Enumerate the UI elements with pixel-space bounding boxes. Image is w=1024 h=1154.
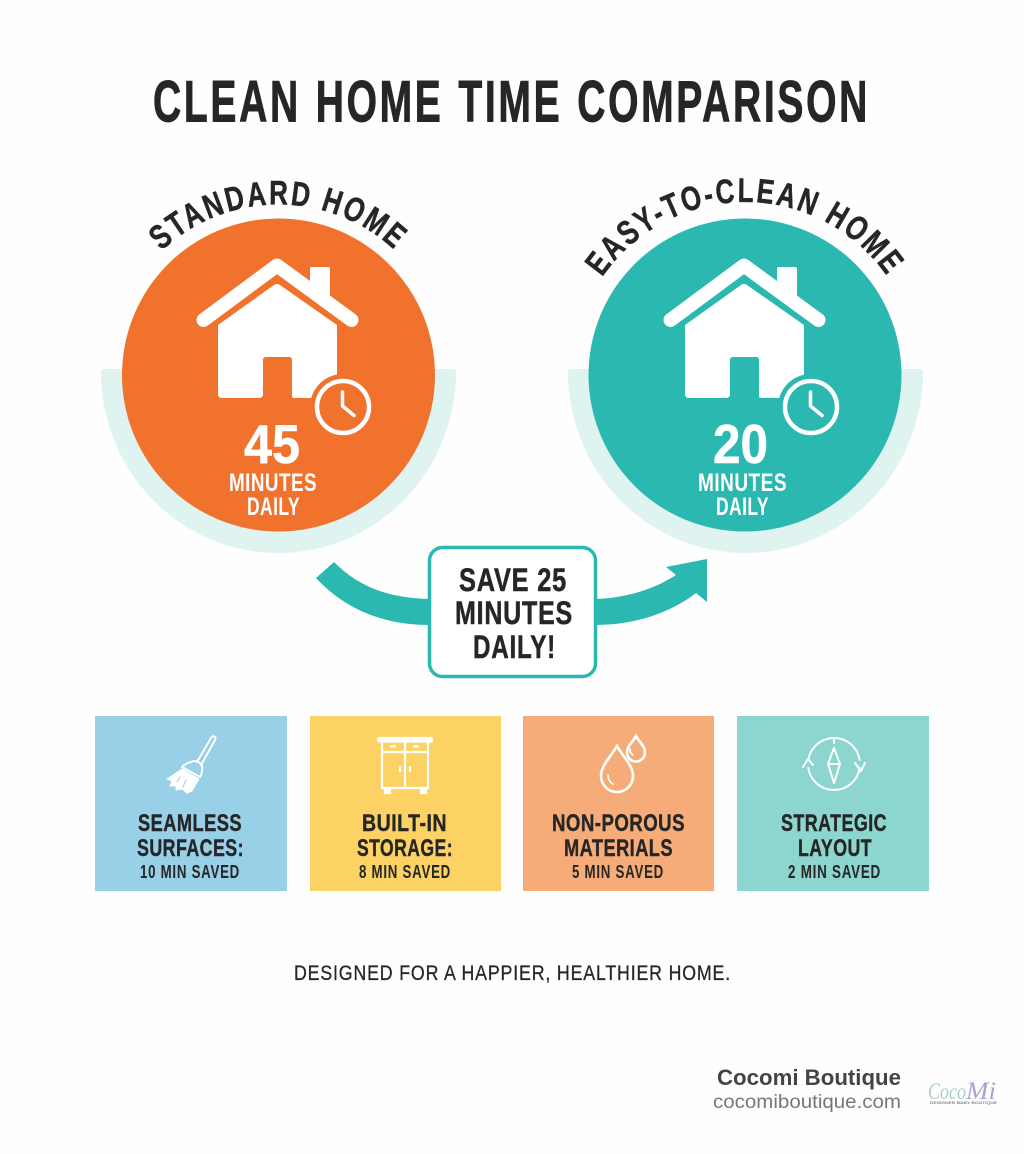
brand name (713, 1065, 901, 1113)
callout: save 25 minutes (430, 548, 596, 676)
text: 5 MIN SAVED (572, 862, 664, 882)
callout: save 25 minutes: SAVE 25 (459, 562, 567, 598)
label: standard home: STANDARD HOME (149, 180, 408, 249)
text: 8 MIN SAVED (359, 862, 451, 882)
value: 20 minutes daily: DAILY (716, 493, 769, 521)
value: 45 minutes daily: 45 (244, 413, 300, 475)
text: 2 MIN SAVED (788, 862, 881, 882)
circle (588, 218, 902, 532)
value: 20 minutes daily: 20 (713, 413, 768, 475)
icon: clock (310, 374, 376, 440)
text: 10 MIN SAVED (140, 862, 240, 882)
arrow: savings flow (316, 559, 707, 625)
icon: broom (167, 736, 216, 793)
value: 20 minutes daily (698, 413, 787, 521)
panel: built-in storage (310, 716, 501, 891)
panel: easy-to-clean home (568, 178, 923, 553)
text: NON-POROUS (552, 810, 685, 837)
brand logo: Mi (965, 1078, 996, 1105)
halo (101, 369, 456, 553)
icon: cabinet (378, 738, 432, 793)
text (552, 810, 685, 882)
text: STRATEGIC (781, 810, 887, 837)
brand logo: Coco (928, 1079, 966, 1104)
panel: standard home (101, 180, 456, 553)
text (357, 810, 453, 882)
brand logo: DESIGNER BABY BOUTIQUE (930, 1100, 997, 1105)
icon: water drops (601, 736, 645, 792)
icon: house (670, 266, 818, 398)
value: 45 minutes daily: DAILY (247, 493, 300, 521)
text (137, 810, 244, 882)
text: BUILT-IN (362, 810, 447, 837)
text (781, 810, 887, 882)
callout: save 25 minutes: MINUTES (455, 595, 573, 631)
halo (568, 369, 923, 553)
text: LAYOUT (798, 835, 872, 862)
value: 20 minutes daily: MINUTES (698, 469, 787, 497)
text: SEAMLESS (138, 810, 242, 837)
label: easy-to-clean home: EASY-TO-CLEAN HOME (584, 178, 905, 276)
panel: non-porous materials (523, 716, 714, 891)
brand name: Cocomi Boutique (717, 1065, 901, 1090)
text: STORAGE: (357, 835, 453, 862)
icon: compass (803, 738, 865, 790)
brand name: cocomiboutique.com (713, 1091, 901, 1113)
panel: strategic layout (737, 716, 929, 891)
brand logo (928, 1078, 997, 1105)
panel: seamless surfaces (95, 716, 287, 891)
circle (122, 218, 435, 532)
tagline: DESIGNED FOR A HAPPIER, HEALTHIER HOME. (294, 962, 731, 985)
icon: clock (778, 374, 844, 440)
value: 45 minutes daily (229, 413, 317, 521)
value: 45 minutes daily: MINUTES (229, 469, 317, 497)
icon: house (204, 266, 352, 398)
callout: save 25 minutes: DAILY! (473, 629, 556, 665)
text: MATERIALS (564, 835, 673, 862)
text: SURFACES: (137, 835, 244, 862)
